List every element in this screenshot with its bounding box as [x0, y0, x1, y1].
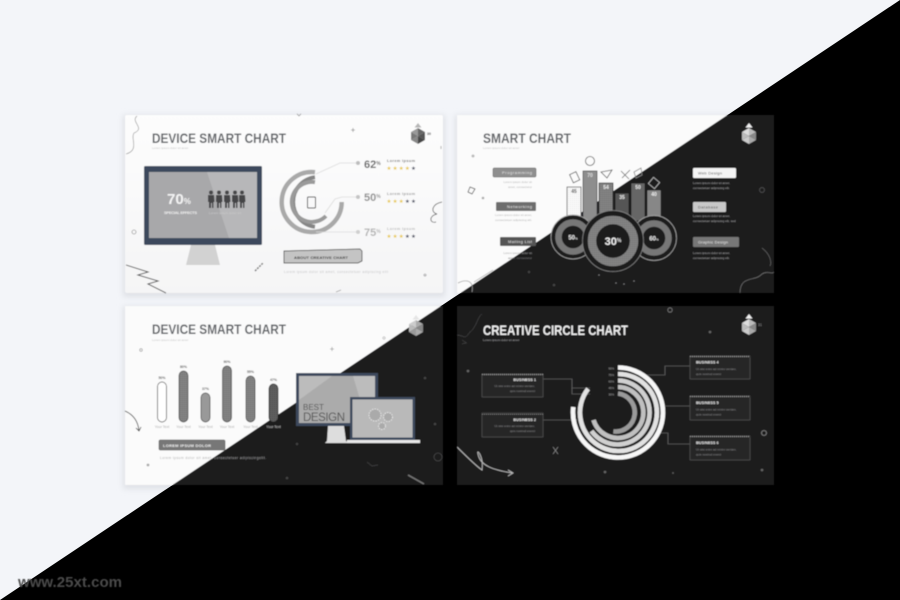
pill: 55%: [243, 370, 258, 429]
arc percent labels: 60%: [608, 380, 615, 384]
label: web design: [693, 168, 736, 190]
label: mailing list: amet, consectetur: [508, 256, 532, 260]
circle: 50%: 50%: [568, 236, 578, 242]
pill bar chart: [155, 360, 281, 429]
pill: 90%: [220, 360, 234, 429]
bar chart: [567, 171, 661, 221]
box: business 6: BUSINESS 6: [696, 441, 719, 445]
label: programming: amet, consectetur: [508, 185, 532, 189]
pill: 37%: [198, 387, 213, 429]
label: programming: [493, 168, 536, 189]
laptop illustration: [347, 397, 420, 443]
stat: 62%: [356, 159, 417, 172]
box: business 5: BUSINESS 5: [696, 401, 719, 405]
title: DEVICE SMART CHART: [152, 321, 286, 337]
doodle: small marks: [140, 337, 442, 479]
circular chart: [573, 368, 663, 458]
label: graphic design: Graphic Design: [698, 240, 728, 244]
arc: fourth: [594, 387, 643, 438]
title: DEVICE SMART CHART: [152, 130, 286, 146]
doodle: molecule: [457, 314, 482, 344]
stat: 75%: %: [376, 229, 381, 235]
label: programming: Lorem ipsum dolor sit: [503, 180, 532, 184]
box: business 2: [482, 413, 543, 437]
bar: 50: 50: [635, 185, 641, 191]
box: business 5: [690, 396, 750, 420]
label: programming: Programming: [502, 170, 532, 175]
icon: gears: [369, 409, 392, 430]
box: business 4: quis nostrud exerci: [696, 372, 722, 376]
stat: 70% special effects: 70%: [167, 191, 191, 208]
stat: 75%: 75: [364, 227, 376, 239]
stat: 62%: Lorem Ipsum: [387, 159, 416, 163]
label: mailing list: Lorem ipsum dolor sit: [503, 251, 532, 255]
stat: 70% special effects: SPECIAL EFFECTS: [164, 210, 197, 215]
panel: creative circle chart: [457, 306, 774, 485]
panel shadows: [123, 115, 777, 489]
subtitle: Lorem ipsum dolor sit amet: [152, 338, 188, 342]
stat: 50%: Lorem Ipsum: [387, 192, 416, 196]
label: mailing list: [500, 237, 536, 260]
circle: 60%: [632, 216, 676, 260]
button: about creative chart: ABOUT CREATIVE CHART: [294, 255, 349, 260]
label: networking: Lorem ipsum dolor sit amet,: [495, 213, 532, 217]
icon: logo: [409, 315, 423, 336]
circle: 30%: [582, 210, 644, 272]
bar: 40: 40: [651, 192, 657, 198]
box: business 5: quis nostrud exerci: [696, 412, 722, 416]
arc: outer: [573, 368, 663, 458]
label: database: Lorem ipsum dolor sit amet,: [693, 214, 730, 218]
title: SMART CHART: [483, 130, 571, 146]
pill: 90%: 90%: [223, 360, 231, 364]
circle: 30%: %: [617, 238, 622, 244]
label: database: [693, 202, 736, 223]
box: business 2: Ut wisi enim ad minim veniam,: [494, 424, 535, 428]
doodle: dots and gears: [467, 308, 766, 474]
text: best design: [303, 403, 345, 424]
arc: inner: [613, 394, 635, 432]
icon: logo: 31: [758, 323, 762, 327]
label: networking: consectetuer adipiscing elit.: [495, 218, 532, 222]
label: database: consectetuer adipiscing elit, sed: [693, 219, 736, 223]
pill: 50%: 50%: [158, 376, 166, 380]
pill: 50%: Your Text: [155, 425, 169, 429]
icon: logo: [411, 123, 431, 144]
circle: 60%: 60%: [649, 236, 659, 242]
doodle: curved arrow: [125, 411, 141, 431]
pill: 47%: Your Text: [266, 425, 281, 429]
stat: 75%: ★★★★★: [386, 234, 417, 240]
doodle: top-left curve: [126, 116, 139, 154]
stat: 75%: [356, 227, 417, 240]
stat: 50%: 50: [364, 192, 376, 204]
subtitle: Lorem ipsum dolor sit amet: [483, 146, 519, 150]
bar: 45: 45: [571, 189, 577, 195]
box: business 1: quis nostrud exerci: [510, 389, 535, 393]
pill: 90%: Your Text: [220, 425, 234, 429]
icon: tablet: [308, 197, 316, 208]
stat: 50%: ★★★★★: [386, 199, 417, 205]
doodle: bottom right curve: [740, 272, 774, 293]
label: graphic design: Lorem ipsum dolor sit amet,: [693, 251, 730, 255]
subtitle: Lorem ipsum dolor sit amet: [152, 146, 188, 150]
watermark: www.25xt.com: [17, 574, 122, 591]
icon: logo: [742, 123, 756, 144]
label: networking: [495, 202, 536, 222]
arc percent labels: 30%: [608, 392, 615, 396]
stat: 75%: Lorem Ipsum: [387, 227, 416, 231]
pill: 50%: [155, 376, 169, 429]
box: business 6: quis nostrud exerci: [696, 452, 722, 456]
pill: 80%: 80%: [180, 365, 188, 369]
caption under people: Lorem ipsum dolor sit: [209, 211, 241, 215]
box: business 2: BUSINESS 2: [513, 418, 536, 422]
arc: third: [592, 380, 650, 444]
icon: logo: [742, 314, 762, 335]
box: business 5: Ut wisi enim ad minim veniam,: [696, 408, 737, 412]
arc percent labels: 75%: [608, 373, 615, 377]
subtitle: Lorem ipsum dolor sit amet: [483, 338, 519, 342]
caption: Lorem ipsum dolor sit amet, consectetuer adipiscing elit: [284, 270, 388, 274]
stat: 50%: %: [376, 194, 381, 200]
slide artwork: [17, 114, 774, 591]
panel: device smart chart (monitor and donut): [125, 114, 443, 293]
text: best design: BEST: [303, 403, 324, 412]
button: lorem ipsum dolor: [159, 440, 225, 450]
button: about creative chart: [284, 249, 362, 263]
desktop monitor illustration: [296, 373, 378, 443]
box: business 4: Ut wisi enim ad minim veniam,: [696, 367, 737, 371]
stat: 50%: [356, 192, 417, 205]
box: business 6: [690, 436, 750, 460]
stat: 62%: ★★★★★: [386, 166, 417, 172]
panel: bar chart and devices: [125, 306, 443, 485]
pill: 37%: 37%: [202, 387, 210, 391]
icon: logo: 30: [427, 132, 431, 136]
pill: 55%: Your Text: [243, 425, 258, 429]
label: database: Database: [698, 204, 719, 210]
bar: 54: 54: [603, 185, 609, 191]
caption: Lorem ipsum dolor sit amet, consectetuer adipiscingelit.: [160, 456, 266, 460]
doodle: pen: [408, 475, 424, 484]
arc percent labels: [608, 366, 615, 396]
icon: five people: [208, 190, 246, 208]
doodle icons above bars: [570, 156, 660, 189]
button: lorem ipsum dolor: LOREM IPSUM DOLOR: [163, 443, 211, 448]
label: web design: Web Design: [698, 170, 722, 176]
title: CREATIVE CIRCLE CHART: [483, 322, 628, 338]
pill: 37%: Your Text: [198, 425, 213, 429]
doodle: zigzag: [126, 265, 166, 293]
donut chart: [282, 172, 342, 232]
doodle: right curl: [431, 202, 442, 222]
panel: smart chart: [457, 115, 774, 293]
pill: 47%: [266, 378, 281, 429]
label: graphic design: consectetuer adipiscing elit.: [693, 256, 730, 260]
stat: 62%: %: [376, 161, 381, 167]
pill: 47%: 47%: [270, 378, 278, 382]
label: web design: consectetuer adipiscing elit.: [693, 186, 730, 190]
box: business 1: BUSINESS 1: [513, 378, 536, 382]
pill: 80%: [176, 365, 191, 429]
bar: 70: 70: [587, 173, 593, 179]
connector lines: [543, 366, 690, 444]
stat: 70% special effects: [164, 191, 197, 215]
doodle: looped arrow: [457, 447, 513, 476]
doodle: small rocket: [255, 263, 263, 271]
box: business 1: Ut wisi enim ad minim veniam,: [494, 384, 535, 388]
arc percent labels: 45%: [608, 386, 615, 390]
stat: 62%: 62: [364, 159, 376, 171]
label: networking: Networking: [507, 204, 532, 209]
label: mailing list: Mailing List: [508, 239, 533, 244]
doodle: cross: [553, 447, 558, 454]
pill: 80%: Your Text: [176, 425, 191, 429]
arc percent labels: 90%: [608, 366, 615, 370]
doodle: small marks: [132, 114, 441, 292]
doodle: small marks: [468, 154, 771, 286]
box: business 6: Ut wisi enim ad minim veniam,: [696, 448, 737, 452]
label: graphic design: [693, 237, 739, 260]
doodle: bottom left swirl: [458, 270, 493, 292]
box: business 4: [690, 356, 750, 379]
box: business 4: BUSINESS 4: [696, 360, 719, 364]
circle: 30%: 30: [605, 236, 617, 248]
arc: second: [580, 374, 657, 451]
box: business 1: [482, 374, 543, 397]
monitor illustration: [144, 166, 262, 265]
label: web design: Lorem ipsum dolor sit amet,: [693, 181, 730, 185]
connector lines: [316, 163, 358, 232]
box: business 2: quis nostrud exerci: [510, 429, 535, 433]
circle: 50%: [551, 215, 595, 259]
text: best design: DESIGN: [303, 412, 345, 424]
bar: 35: 35: [619, 195, 625, 201]
pill: 55%: 55%: [247, 370, 255, 374]
